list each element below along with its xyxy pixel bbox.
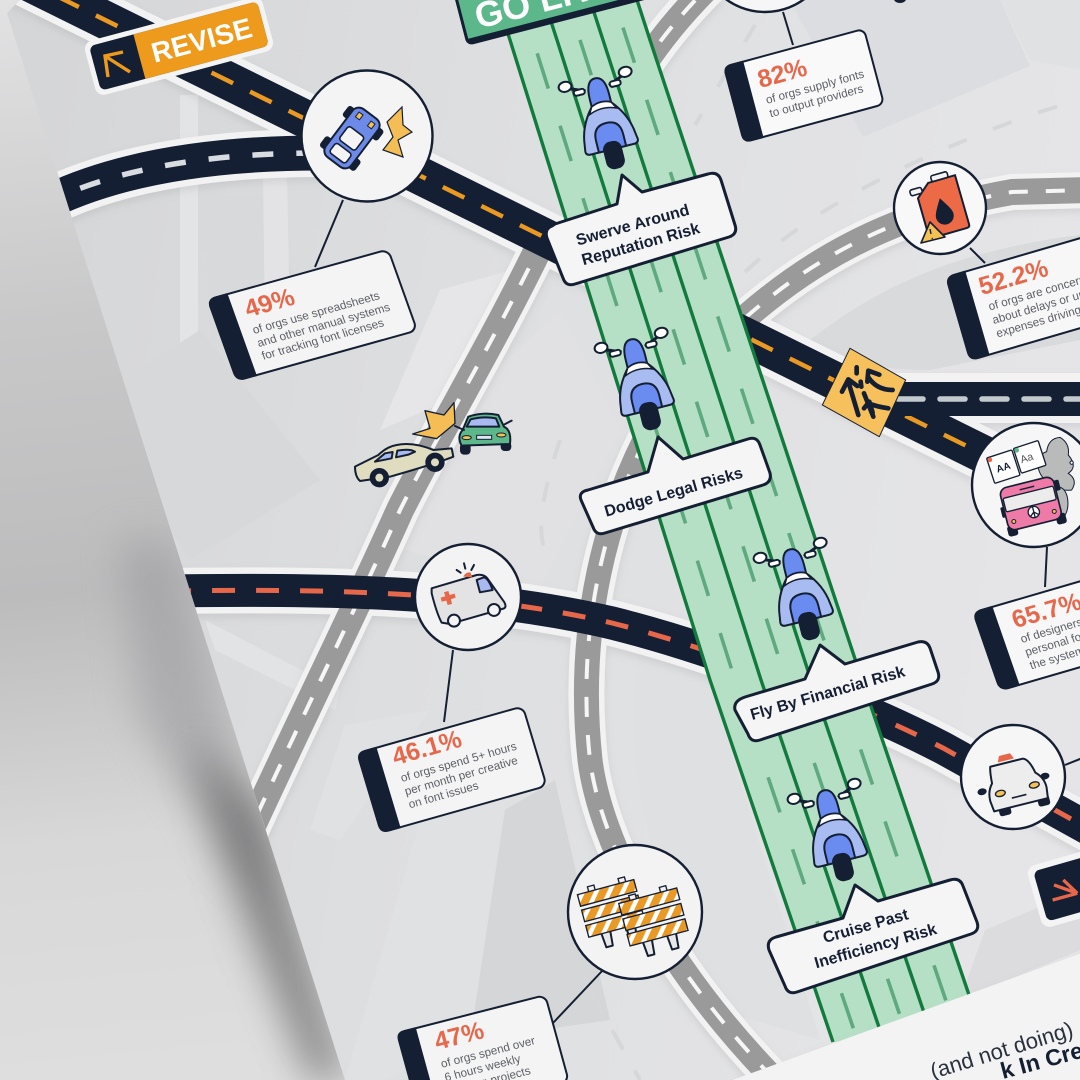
card: 52.2%: 52.2% [975, 254, 1051, 301]
card: 46.1%: on font issues [407, 779, 480, 811]
road: dark red route [165, 590, 1080, 835]
road: gray arc [745, 190, 1080, 318]
icon: car crash on road [355, 403, 512, 486]
map background blocks [180, 44, 1080, 1028]
direction sign bottom right [1026, 831, 1080, 929]
card: 46.1%: 46.1% [389, 725, 465, 771]
card: 52.2% [946, 237, 1080, 360]
road: dark white-dash spur right [896, 382, 1080, 416]
circle icon: bus with fonts: Aa [1019, 451, 1035, 466]
warning sign: merging arrows [822, 348, 906, 437]
road: dark orange route [22, 0, 992, 470]
card: 82% [723, 28, 884, 143]
scooter 1 [558, 66, 639, 170]
icon: revise arrow [105, 52, 130, 77]
callout: swerve: Reputation Risk [580, 220, 702, 269]
callout: dodge: Dodge Legal Risks [603, 465, 745, 521]
callout: dodge [580, 437, 770, 534]
callout: fly by [735, 642, 939, 741]
circle icon: crashed car [302, 70, 432, 202]
circle icon: fuel can [894, 162, 986, 254]
circle icon: taxi [961, 725, 1065, 829]
road: gray curve [586, 440, 770, 1075]
small cropped element at top edge [894, 0, 906, 3]
callout: cruise [768, 879, 978, 993]
connector lines [315, 12, 1080, 1023]
card: 49%: and other manual systems [255, 301, 392, 350]
card: 65.7% [974, 580, 1080, 690]
card: 47%: of orgs spend over [439, 1034, 537, 1071]
road: gray top [650, 0, 714, 64]
circle icon: ambulance [415, 544, 521, 650]
footer panel [734, 954, 1080, 1080]
circle top partially visible [725, 0, 805, 14]
card: 49%: of orgs use spreadsheets [251, 289, 382, 337]
callout: cruise: Cruise Past [821, 906, 911, 947]
green highway [497, 0, 985, 1042]
scooter 4 [786, 778, 868, 882]
callout: fly by: Fly By Financial Risk [748, 663, 907, 724]
card: 82%: of orgs supply fonts [764, 68, 866, 107]
circle icon: barricades [568, 845, 702, 979]
scooter 3 [752, 536, 834, 640]
card: 82%: 82% [755, 54, 810, 94]
road: gray diagonal [250, 235, 545, 830]
card: 49% [207, 248, 417, 382]
card: 46.1%: of orgs spend 5+ hours [399, 740, 518, 785]
callout: cruise: Inefficiency Risk [813, 921, 939, 972]
scooter 2 [594, 326, 675, 430]
go live sign [455, 0, 644, 44]
card: 82%: to output providers [768, 82, 865, 120]
card: 47%: 47% [431, 1016, 487, 1056]
card: 46.1% [356, 705, 547, 834]
card: 46.1%: per month per creative [403, 754, 519, 798]
callout: swerve: Swerve Around [574, 202, 691, 249]
road: dark white-dash spur left [40, 153, 330, 206]
circle icon: bus with fonts [972, 423, 1080, 547]
faint ghost roads [541, 25, 1080, 1080]
revise sign [83, 0, 275, 97]
card: 49%: for tracking font licenses [260, 317, 386, 363]
callout: swerve [546, 173, 736, 285]
card: 47% [396, 994, 569, 1080]
revise sign: REVISE [148, 12, 255, 69]
card: 49%: 49% [241, 283, 298, 323]
circle icon: bus with fonts: AA [995, 461, 1012, 476]
